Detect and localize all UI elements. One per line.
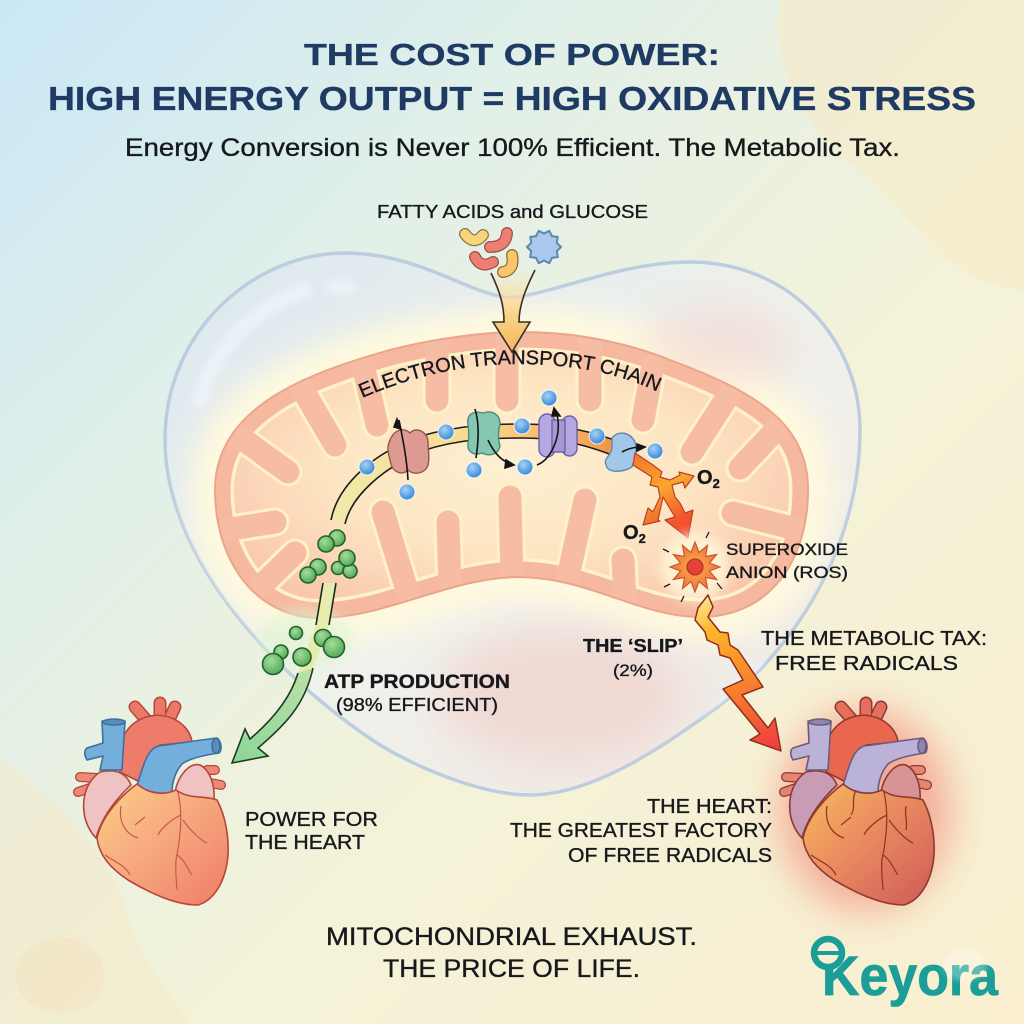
- arrow: fuel entering: [491, 270, 535, 352]
- label: O2 left: 2: [639, 531, 646, 546]
- label: ATP production: (98% EFFICIENT): [336, 695, 498, 715]
- label: O2 right: O: [697, 467, 713, 489]
- protein complex IV: [605, 433, 636, 471]
- stressed heart: [784, 703, 934, 905]
- label: the slip: [583, 636, 683, 680]
- label: ATP production: ATP PRODUCTION: [324, 672, 510, 693]
- mitochondrion: [215, 330, 808, 618]
- label: greatest factory: OF FREE RADICALS: [568, 845, 772, 867]
- label: greatest factory: THE HEART:: [647, 796, 772, 818]
- label: ATP production: [324, 672, 510, 715]
- ATP clusters: [262, 530, 357, 674]
- label: the slip: THE ‘SLIP’: [583, 636, 683, 656]
- electron transport membrane: [331, 424, 628, 524]
- closing statement: THE PRICE OF LIFE.: [383, 955, 640, 983]
- ATP glow: [257, 608, 353, 672]
- label: power for the heart: THE HEART: [245, 832, 365, 854]
- label: superoxide anion: [726, 540, 848, 582]
- electrons: [359, 390, 663, 500]
- heart-shaped bubble: [165, 253, 860, 795]
- label: superoxide anion: ANION (ROS): [726, 563, 848, 582]
- title: THE COST OF POWER:: [304, 37, 720, 72]
- label: power for the heart: [245, 809, 378, 854]
- label: O2 left: O: [623, 522, 639, 544]
- icon: superoxide burst: [661, 532, 729, 602]
- arrow: free radicals to heart: [695, 595, 781, 751]
- label: fatty acids and glucose: FATTY ACIDS and GLUCOSE: [377, 202, 648, 222]
- logo: Keyora: Keyora: [822, 944, 999, 1007]
- healthy heart: [78, 703, 228, 905]
- protein complex I: [388, 430, 429, 473]
- label: greatest factory: [510, 796, 772, 867]
- protein complex III: [539, 414, 577, 457]
- arrow: electron slip: [633, 453, 694, 538]
- label: greatest factory: THE GREATEST FACTORY: [510, 820, 772, 842]
- electron flow arrows: [394, 408, 645, 480]
- heart glow: [780, 710, 950, 910]
- label: power for the heart: POWER FOR: [245, 809, 378, 831]
- label: metabolic tax: FREE RADICALS: [775, 653, 958, 675]
- label: electron transport chain: ELECTRON TRANSPORT CHAIN: [358, 350, 662, 398]
- icons: fatty acids: [465, 233, 513, 272]
- title: [48, 37, 976, 117]
- label: metabolic tax: [761, 628, 987, 675]
- label: superoxide anion: SUPEROXIDE: [726, 540, 848, 559]
- icon: glucose: [527, 231, 561, 263]
- label: the slip: (2%): [613, 661, 653, 680]
- closing statement: [326, 923, 697, 983]
- label: O2 right: 2: [713, 476, 720, 491]
- subtitle: Energy Conversion is Never 100% Efficient. The Metabolic Tax.: [125, 134, 900, 162]
- label: metabolic tax: THE METABOLIC TAX:: [761, 628, 987, 650]
- closing statement: MITOCHONDRIAL EXHAUST.: [326, 923, 697, 951]
- title: HIGH ENERGY OUTPUT = HIGH OXIDATIVE STRESS: [48, 80, 976, 117]
- protein complex II: [468, 412, 500, 455]
- ATP arrow to heart: [232, 583, 336, 763]
